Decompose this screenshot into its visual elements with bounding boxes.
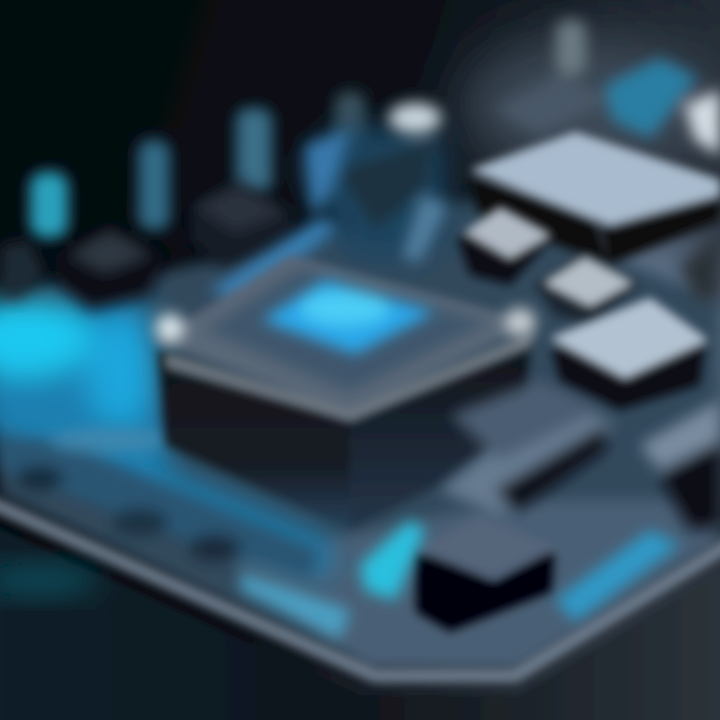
- right block: stepped dark modules: [440, 380, 720, 530]
- central chip: glowing square: [262, 280, 435, 354]
- central chip: sides: [158, 340, 530, 530]
- right block: lower wide slab: [550, 298, 708, 410]
- right block: large light slab: [470, 132, 720, 265]
- cyan channels at the lower edge: [240, 520, 680, 640]
- tower: light blue: [236, 108, 272, 193]
- small left blocks with glowing towers: [30, 92, 365, 238]
- tower: pale: [335, 92, 365, 152]
- haze behind the upper right blocks: [460, 35, 720, 480]
- central chip: inner panel: [205, 268, 490, 392]
- top right modules: [495, 20, 720, 300]
- circuit traces on the left: [0, 428, 320, 580]
- tower: blue-grey: [138, 140, 170, 230]
- teal glow on the floor: [0, 564, 100, 596]
- right block: small slabs: [458, 205, 640, 325]
- platform base: [0, 200, 720, 670]
- left cyan glow field: [0, 300, 330, 580]
- dark left pedestals: [0, 180, 295, 310]
- module: black front block: [415, 515, 560, 632]
- tower: cyan: [30, 172, 68, 238]
- floor below the platform: [0, 520, 720, 720]
- central chip: top face: [155, 255, 535, 422]
- chip corner highlights: [156, 308, 535, 342]
- platform rim: [0, 498, 720, 676]
- holographic funnel above the chip: [300, 125, 450, 260]
